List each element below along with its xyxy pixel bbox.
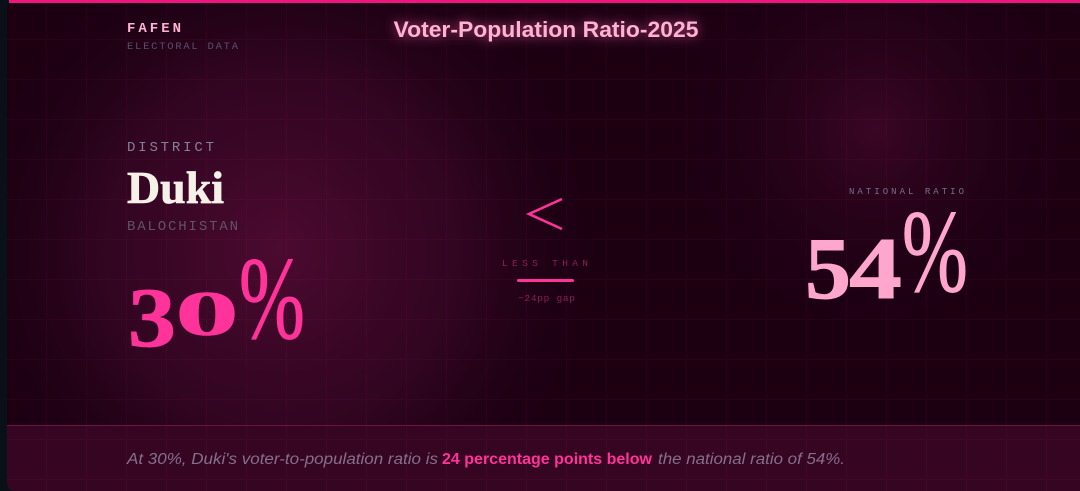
- gap label: −24pp gap: [518, 293, 575, 304]
- district label: DISTRICT: [127, 140, 214, 156]
- district name: Duki: [127, 163, 224, 213]
- national value: 54%: 5: [805, 220, 851, 318]
- district block: [127, 140, 238, 235]
- footer sentence: the national ratio of 54%.: [658, 451, 845, 468]
- footer band: [7, 425, 1080, 491]
- brand block: ELECTORAL DATA: [127, 41, 239, 53]
- district value: 30%: 3: [128, 270, 176, 365]
- title: Voter-Population Ratio-2025: [394, 17, 698, 42]
- province label: BALOCHISTAN: [127, 219, 238, 235]
- comparison block: [502, 199, 588, 304]
- brand block: [127, 21, 239, 53]
- gap bar: [517, 279, 574, 282]
- top accent bar: [9, 0, 1080, 3]
- footer sentence: At 30%, Duki's voter-to-population ratio is: [126, 451, 438, 468]
- title: Voter-Population Ratio-2025: [394, 17, 698, 42]
- national value: 54%: 4: [849, 220, 902, 318]
- icon: less-than sign: [529, 199, 562, 229]
- national value: 54%: %: [902, 186, 968, 317]
- footer sentence: 24 percentage points below: [442, 451, 653, 468]
- district value: 30%: %: [239, 233, 305, 364]
- district value: 30%: [128, 233, 305, 365]
- brand block: FAFEN: [127, 21, 181, 37]
- national value: 54%: [805, 186, 968, 318]
- national label: NATIONAL RATIO: [849, 187, 964, 197]
- less than label: LESS THAN: [502, 258, 588, 269]
- footer sentence: [126, 451, 845, 468]
- district value: 30%: 0: [175, 278, 239, 349]
